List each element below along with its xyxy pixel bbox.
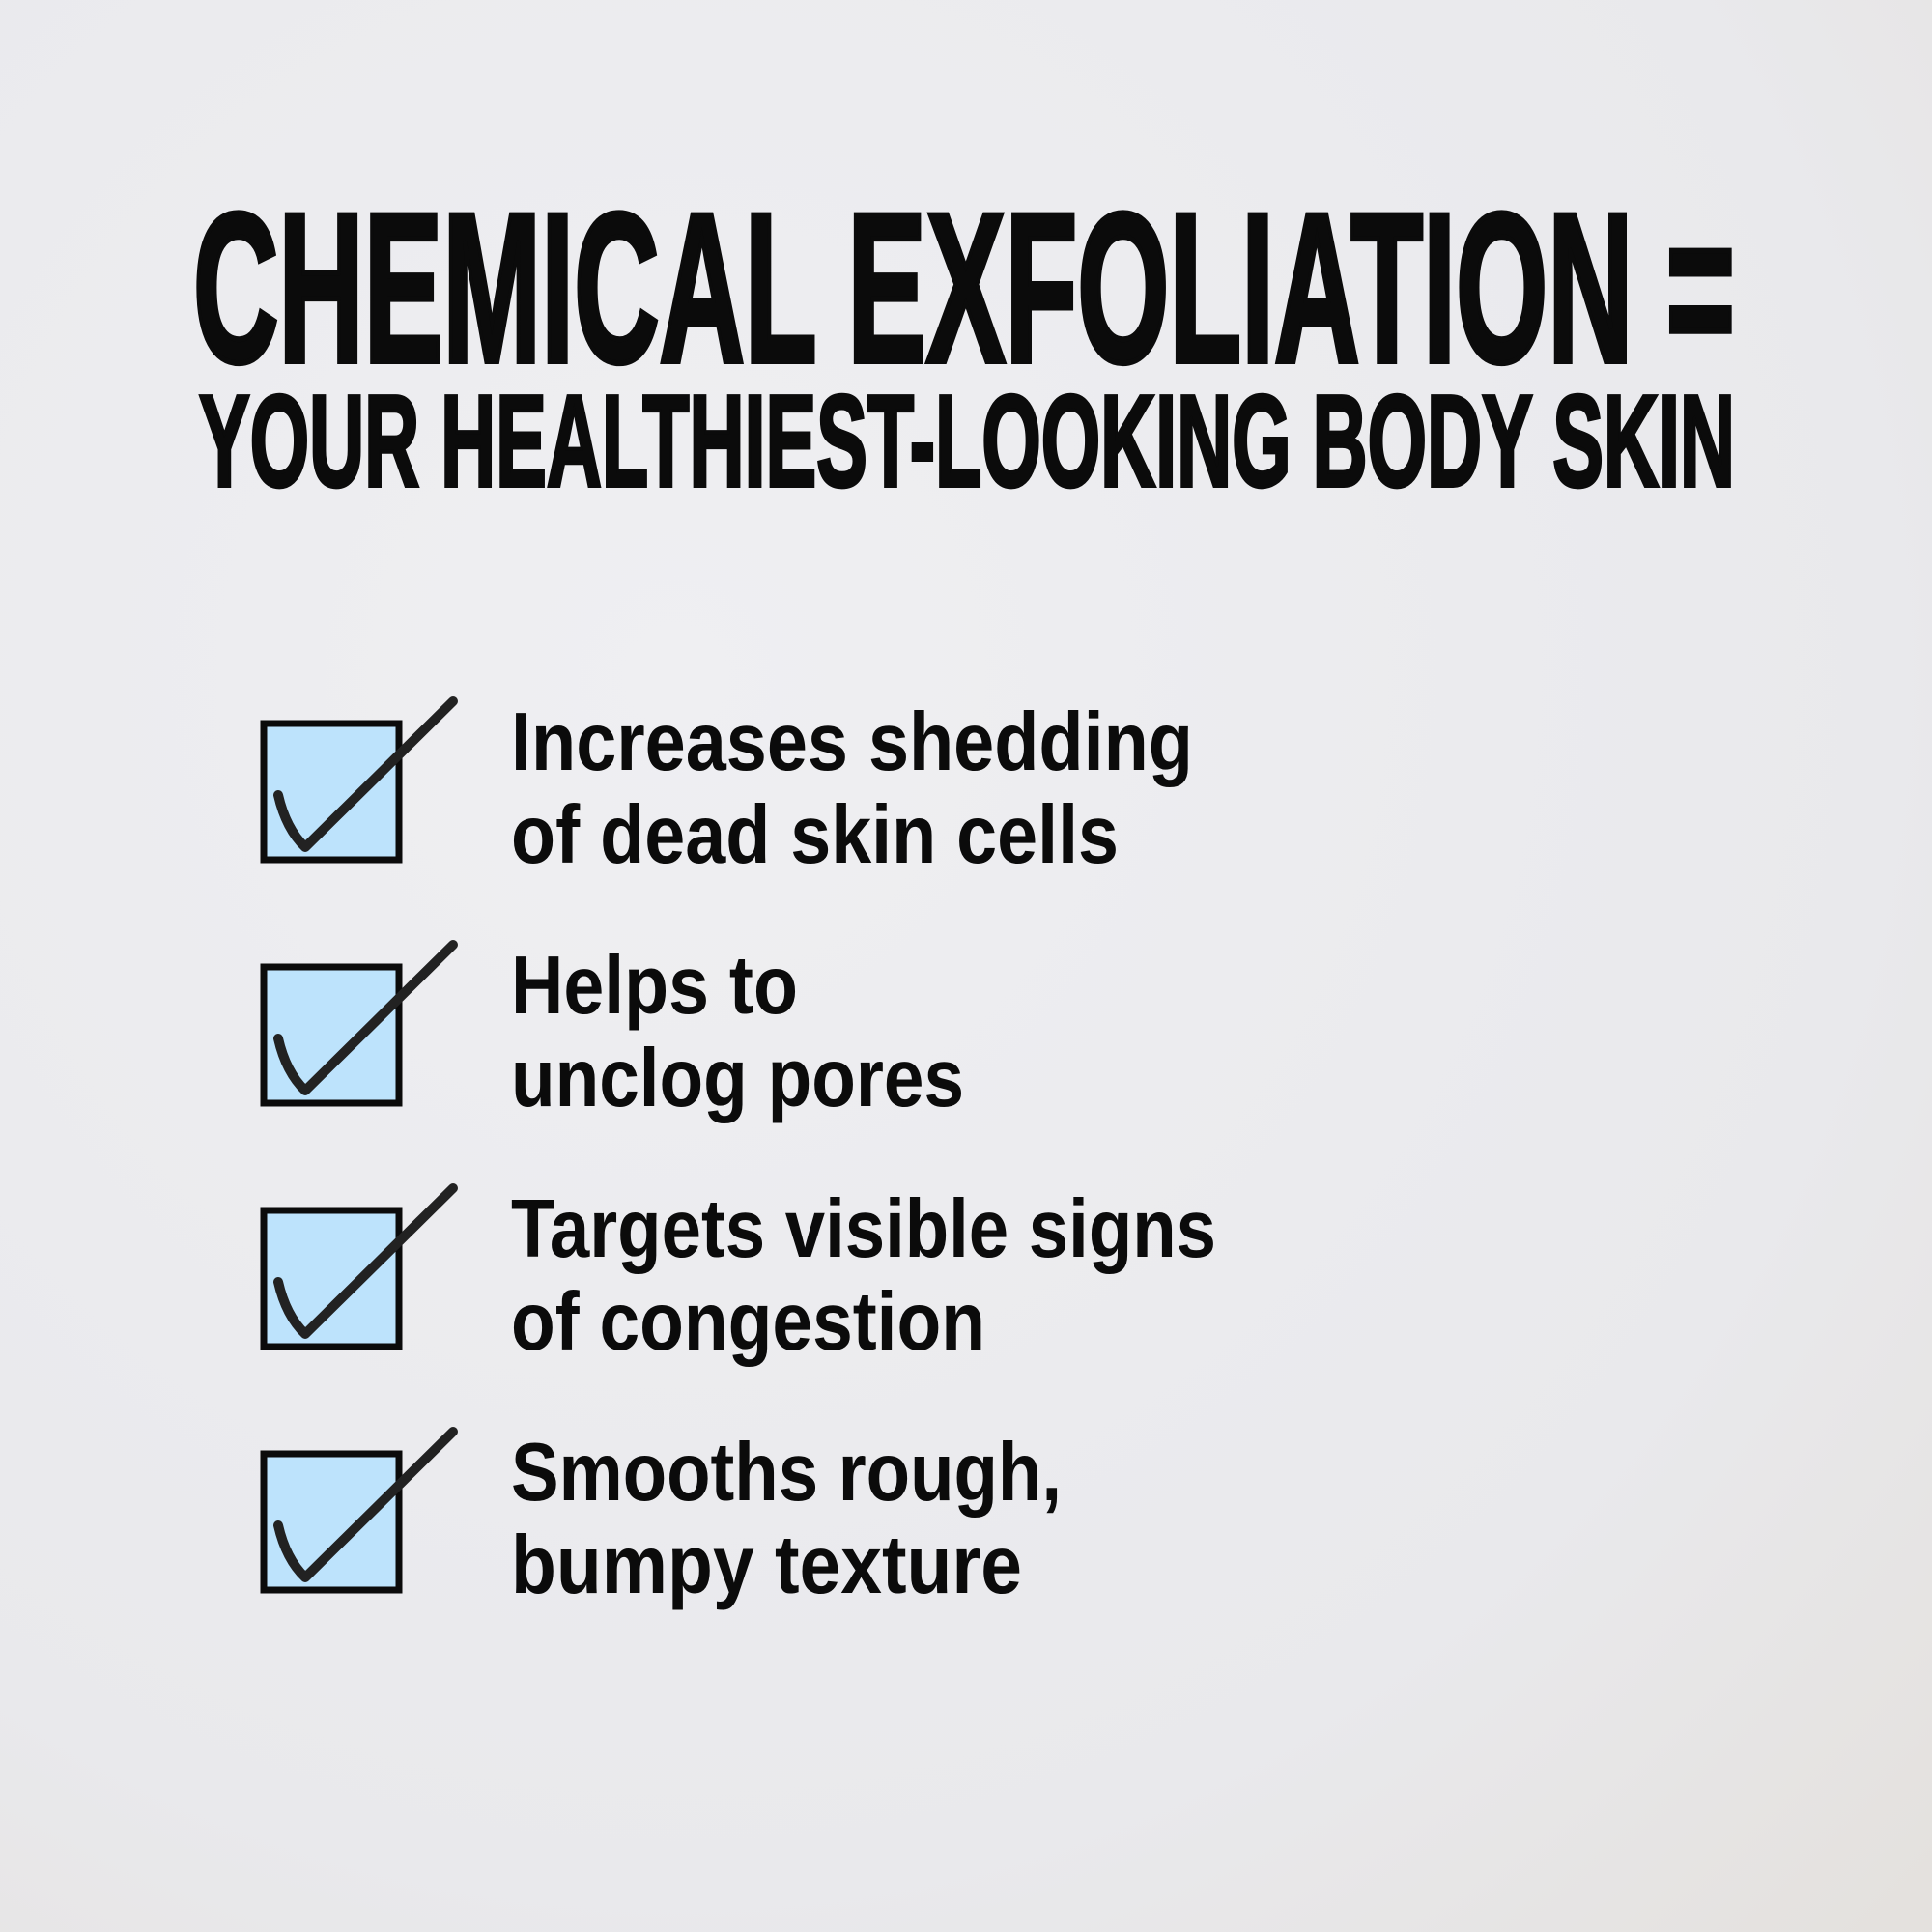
text: benefit 4: Smooths rough, xyxy=(511,1427,1062,1519)
item 3 xyxy=(264,1183,1216,1368)
text: benefit 4 xyxy=(511,1427,1062,1611)
item 1 xyxy=(264,696,1193,881)
text: benefit 2: unclog pores xyxy=(511,1033,964,1124)
text: benefit 3: Targets visible signs xyxy=(511,1183,1216,1275)
icon: checkbox xyxy=(264,701,453,860)
icon: checkbox xyxy=(264,1432,453,1590)
item 2 xyxy=(264,940,964,1124)
text: benefit 4: bumpy texture xyxy=(511,1520,1022,1611)
text: benefit 3 xyxy=(511,1183,1216,1368)
text: benefit 1: Increases shedding xyxy=(511,696,1193,788)
text: benefit 3: of congestion xyxy=(511,1276,985,1368)
title xyxy=(193,169,1735,514)
text: benefit 1: of dead skin cells xyxy=(511,789,1119,881)
icon: checkbox xyxy=(264,1188,453,1347)
text: benefit 1 xyxy=(511,696,1193,881)
item 4 xyxy=(264,1427,1062,1611)
icon: checkbox xyxy=(264,945,453,1103)
text: benefit 2 xyxy=(511,940,964,1124)
text: benefit 2: Helps to xyxy=(511,940,798,1032)
